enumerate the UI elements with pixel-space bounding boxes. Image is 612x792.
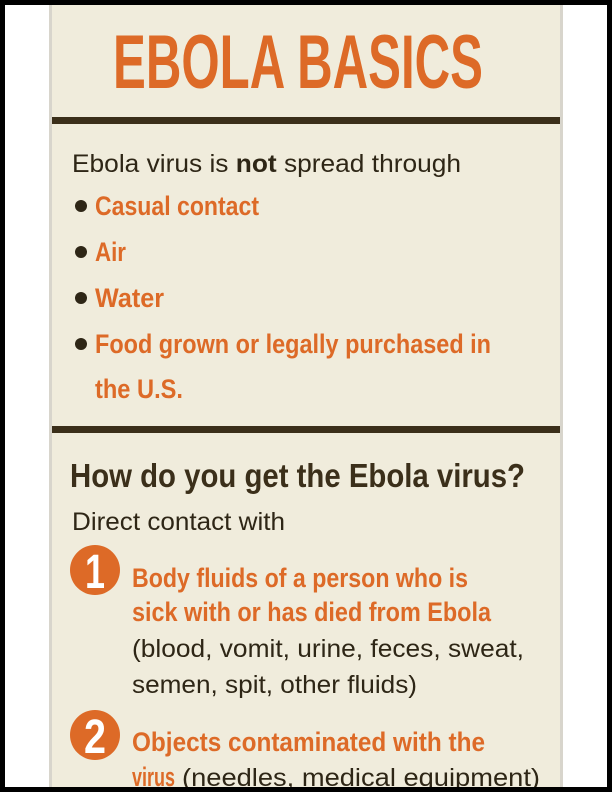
item 2: objects: Objects contaminated with the <box>132 727 485 757</box>
item 1: body fluids: Body fluids of a person who is <box>132 563 468 593</box>
icon: number 2 <box>70 710 120 764</box>
item 1: body fluids: semen, spit, other fluids) <box>132 671 417 699</box>
bullet: casual contact: Casual contact <box>95 191 259 221</box>
heading: how do you get: How do you get the Ebola virus? <box>70 457 525 494</box>
item 2: objects <box>70 710 540 792</box>
icon: number 1: 1 <box>85 546 105 599</box>
text block: direct contact: Direct contact with <box>72 508 285 536</box>
item 2: objects: (needles, medical equipment) <box>182 764 540 792</box>
item 2: objects: virus <box>132 762 175 792</box>
bullet: water: Water <box>95 283 164 313</box>
item 1: body fluids: (blood, vomit, urine, feces, sweat, <box>132 635 524 663</box>
bullet: air: Air <box>95 237 126 267</box>
icon: number 2: 2 <box>84 711 106 764</box>
item 1: body fluids: sick with or has died from Ebola <box>132 597 492 627</box>
item 1: body fluids <box>70 545 524 699</box>
bullet: food: Food grown or legally purchased in <box>95 329 491 359</box>
bullet: food: the U.S. <box>95 374 183 404</box>
list: not spread via <box>75 191 491 404</box>
bullet: air <box>75 237 126 267</box>
icon: number 1 <box>70 545 120 599</box>
text block: not spread through: Ebola virus is not spread through <box>72 150 461 178</box>
bullet: food <box>75 329 491 404</box>
